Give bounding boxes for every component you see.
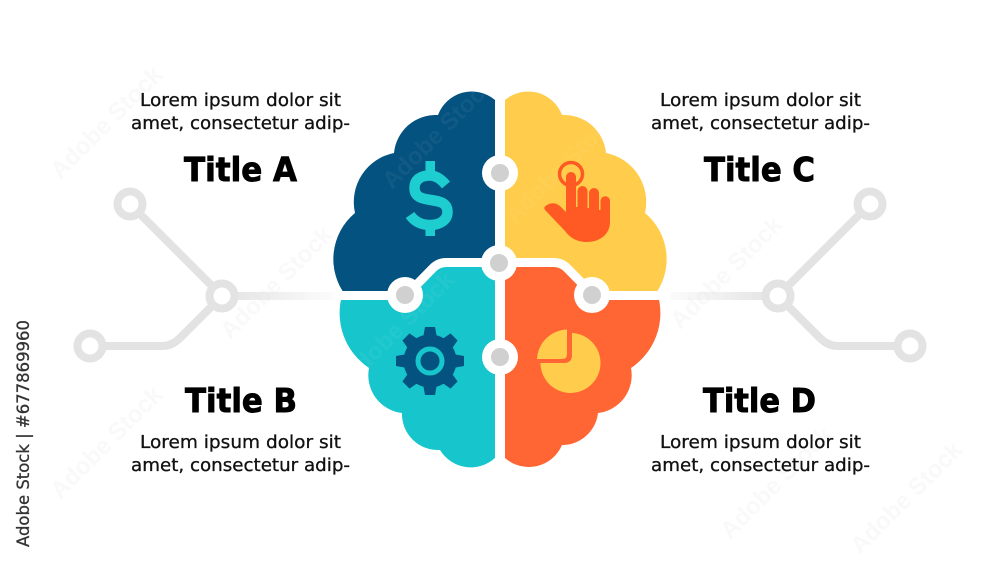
brain watermark: Adobe Stock <box>337 266 460 389</box>
stock id side text: Adobe Stock | #677869960 <box>14 320 34 547</box>
description B: Lorem ipsum dolor sit <box>140 433 341 453</box>
white dividing lines <box>335 262 670 296</box>
text block C <box>651 91 870 189</box>
background watermark: Adobe Stock <box>215 221 338 344</box>
text block D <box>651 381 870 476</box>
description B: amet, consectetur adip- <box>131 456 350 476</box>
left circuit connector <box>78 192 335 358</box>
brain watermark: Adobe Stock <box>500 106 623 229</box>
right circuit connector <box>665 192 922 358</box>
node: left <box>387 277 423 313</box>
description D: Lorem ipsum dolor sit <box>660 433 861 453</box>
description C: amet, consectetur adip- <box>651 114 870 134</box>
icon: dollar sign <box>410 161 448 236</box>
brain <box>333 91 670 467</box>
description D: amet, consectetur adip- <box>651 456 870 476</box>
background watermark: Adobe Stock <box>715 421 838 544</box>
icon: gear <box>396 327 464 395</box>
background watermark: Adobe Stock <box>845 436 968 559</box>
brain watermark <box>337 71 623 389</box>
node: centre <box>481 245 517 281</box>
node: top <box>482 155 518 191</box>
description C: Lorem ipsum dolor sit <box>660 91 861 111</box>
text block A <box>131 91 350 189</box>
title A: Title A <box>184 150 297 189</box>
brain watermark: Adobe Stock <box>377 71 500 194</box>
title C: Title C <box>704 150 815 189</box>
description A: amet, consectetur adip- <box>131 114 350 134</box>
icon: pointing hand <box>544 162 610 242</box>
description A: Lorem ipsum dolor sit <box>140 91 341 111</box>
title B: Title B <box>185 381 297 420</box>
icon: pie chart <box>537 330 601 393</box>
node: right <box>574 277 610 313</box>
brain quadrant: yellow <box>505 91 667 296</box>
brain quadrant: navy <box>333 91 495 296</box>
node: bottom <box>482 339 518 375</box>
title D: Title D <box>703 381 816 420</box>
brain quadrant: orange <box>505 262 660 467</box>
text block B <box>131 381 350 476</box>
brain quadrant: teal <box>340 262 495 467</box>
background watermark: Adobe Stock <box>665 211 788 334</box>
background watermark: Adobe Stock <box>45 381 168 504</box>
background watermark: Adobe Stock <box>45 61 168 184</box>
